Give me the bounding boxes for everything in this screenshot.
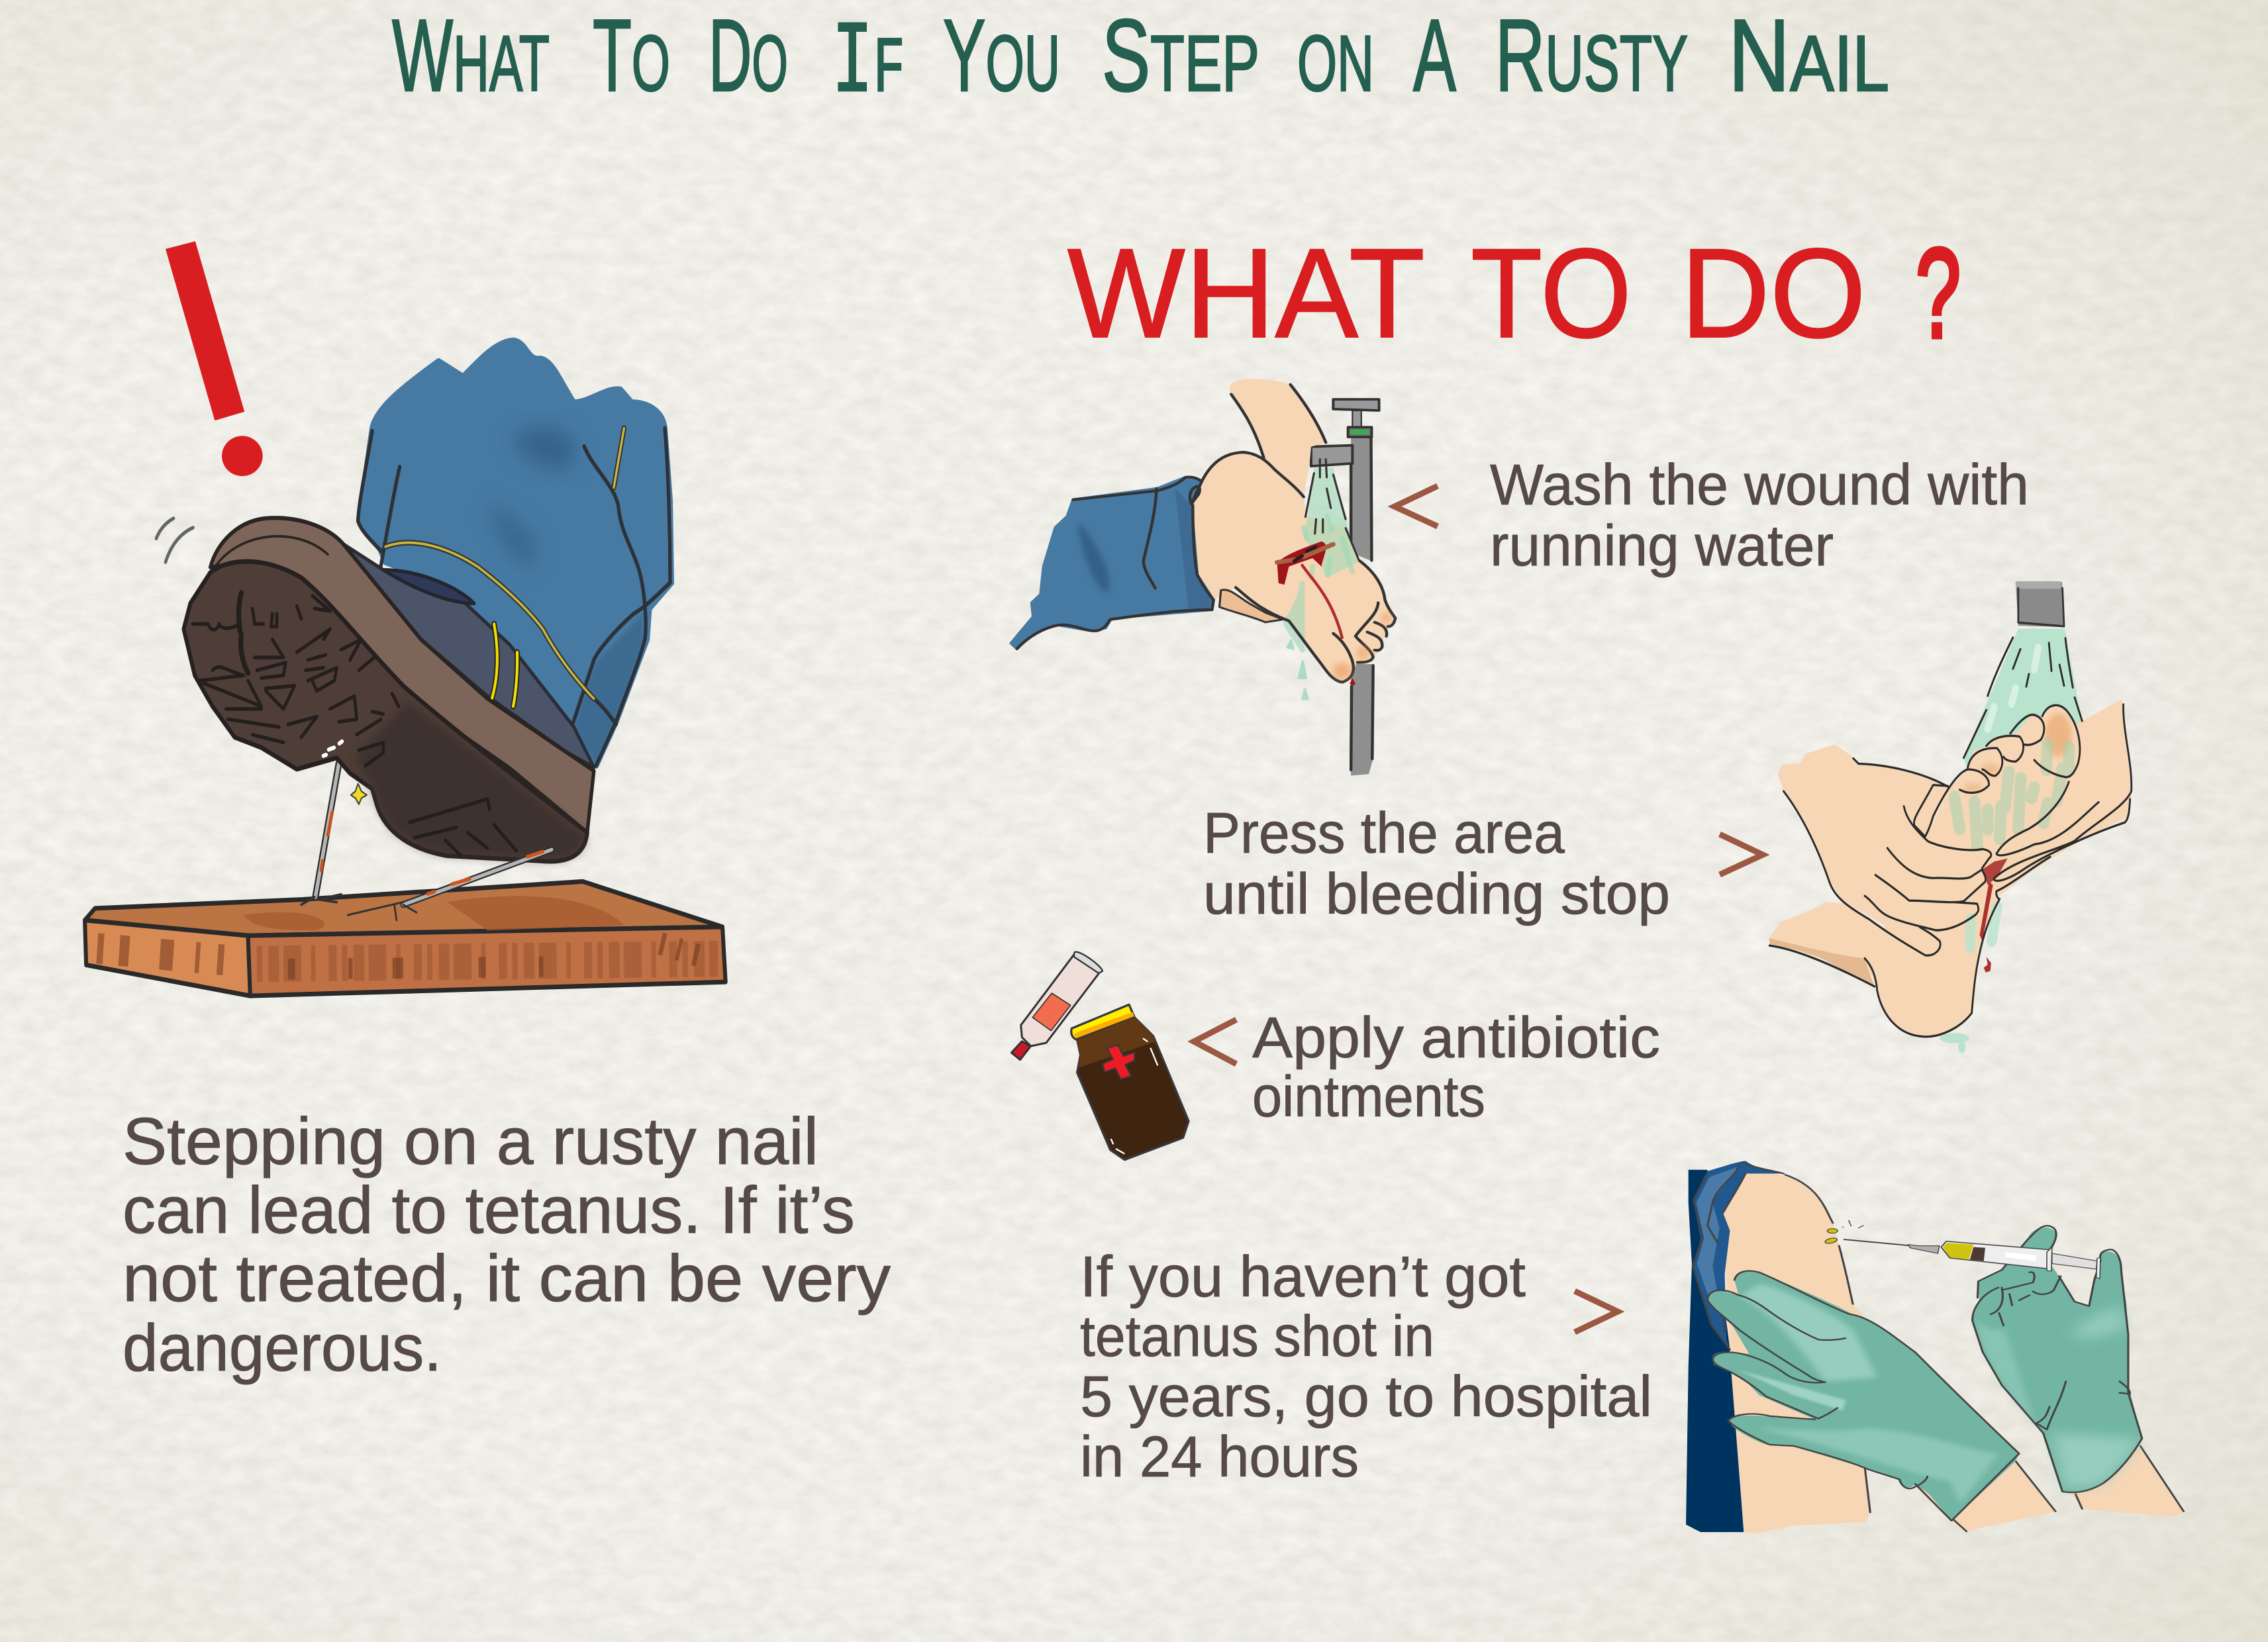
text block: tetanus shot: tetanus shot in — [1080, 1304, 1434, 1369]
text block: tetanus shot: in 24 hours — [1080, 1425, 1359, 1489]
illustration: boot stepping on a rusty nail — [85, 241, 726, 996]
title: STEP — [1102, 0, 1259, 113]
text block: apply — [1252, 1006, 1660, 1129]
wrist of far hand — [2071, 1446, 2184, 1517]
text block: wash — [1490, 453, 2029, 578]
text block: stepping on a rusty nail: Stepping on a rusty nail — [123, 1104, 818, 1179]
text block: tetanus shot: If you haven’t got — [1080, 1245, 1526, 1309]
chevron: wash — [1395, 486, 1438, 526]
boot upper — [343, 544, 594, 767]
near glove — [1707, 1271, 2019, 1521]
text block: press: until bleeding stop — [1203, 862, 1670, 926]
illustration: injection with gloves — [1686, 1161, 2184, 1533]
title: RUSTY — [1495, 0, 1688, 113]
jar of ointment — [1071, 1004, 1189, 1160]
title: TO — [593, 0, 670, 113]
text block: tetanus shot — [1080, 1245, 1652, 1489]
nail upright — [301, 763, 341, 904]
upper arm — [1723, 1173, 1870, 1533]
text block: tetanus shot: 5 years, go to hospital — [1080, 1365, 1652, 1429]
foot — [1869, 705, 2079, 1037]
text block: wash: Wash the wound with — [1490, 453, 2029, 517]
illustration: ointment tube and jar — [1011, 952, 1189, 1160]
title: DO — [709, 0, 788, 113]
outlines — [1769, 638, 2132, 1037]
leg behind — [1230, 379, 1326, 497]
syringe — [1844, 1239, 2100, 1279]
heading: what to do: DO — [1681, 222, 1866, 364]
water stream — [1964, 629, 2082, 773]
hand under foot — [1219, 590, 1283, 622]
heading: what to do: ? — [1916, 222, 1961, 364]
text block: stepping on a rusty nail: can lead to tetanus. If it’s — [123, 1173, 855, 1247]
motion lines — [156, 518, 193, 562]
yellow spark — [351, 784, 367, 804]
text block: press: Press the area — [1203, 801, 1565, 865]
text block: stepping on a rusty nail: dangerous. — [123, 1311, 442, 1385]
bent nail under heel — [348, 849, 552, 920]
heading: what to do: WHAT — [1067, 222, 1425, 364]
heading: what to do: TO — [1471, 222, 1632, 364]
wound and blood — [1277, 542, 1356, 687]
illustration: washing foot under tap — [1011, 379, 1395, 775]
back hand — [1997, 699, 2132, 897]
rolled jeans — [1011, 477, 1214, 649]
toe shading and overlay water — [1954, 648, 2071, 847]
left hand — [1777, 744, 1989, 955]
blood — [1980, 859, 2008, 973]
arm outline — [1785, 1175, 1870, 1512]
title: A — [1413, 0, 1456, 113]
text block: apply: Apply antibiotic — [1252, 1006, 1660, 1070]
heading: what to do — [1067, 222, 1961, 364]
chevron: apply — [1194, 1020, 1236, 1064]
text block: stepping on a rusty nail — [123, 1104, 891, 1385]
illustration: pressing the wound — [1768, 581, 2132, 1053]
tread marks — [193, 593, 517, 855]
icon: red exclamation mark — [166, 241, 263, 476]
ointment tube — [1011, 952, 1103, 1060]
jeans leg — [358, 340, 671, 765]
title: IF — [832, 5, 905, 122]
yellow injection marks — [1824, 1220, 1863, 1245]
water stream — [1286, 459, 1360, 699]
navy shirt — [1686, 1170, 1744, 1532]
faucet and pipe — [1311, 399, 1379, 775]
blue sleeve — [1693, 1161, 1784, 1350]
text block: apply: ointments — [1252, 1065, 1485, 1129]
title — [392, 0, 1889, 122]
far glove — [1973, 1226, 2142, 1492]
heel of other foot — [1768, 902, 1976, 1037]
title: YOU — [943, 0, 1060, 113]
text block: stepping on a rusty nail: not treated, it can be very — [123, 1241, 891, 1316]
foot outlines — [1191, 385, 1395, 682]
text block: press — [1203, 801, 1670, 926]
text block: wash: running water — [1490, 514, 1834, 578]
wooden plank — [85, 881, 726, 996]
title: WHAT — [392, 0, 550, 113]
tap head — [2016, 581, 2064, 627]
foot — [1193, 452, 1395, 682]
chevron: shot — [1575, 1291, 1618, 1332]
wrist of near hand — [1915, 1461, 2055, 1531]
title: ON — [1297, 19, 1374, 108]
chevron: press — [1720, 834, 1763, 875]
boot sole — [183, 518, 594, 861]
title: NAIL — [1728, 0, 1889, 113]
